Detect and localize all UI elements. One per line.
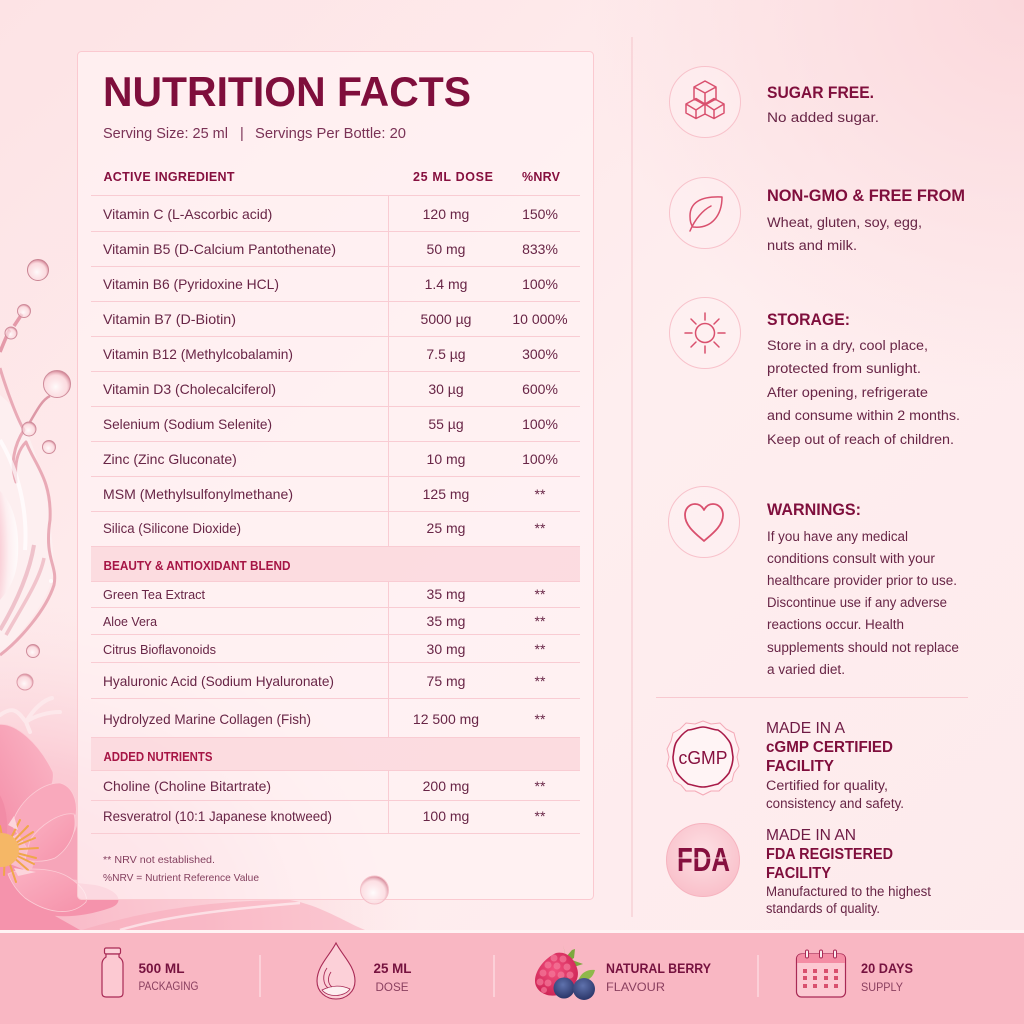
table header: ACTIVE INGREDIENT bbox=[104, 170, 235, 184]
ingredient rows: Zinc (Zinc Gluconate) bbox=[103, 451, 237, 467]
text: FACILITY bbox=[766, 865, 832, 882]
item: 20 days supply bbox=[796, 950, 913, 997]
beauty blend rows: Hyaluronic Acid (Sodium Hyaluronate) bbox=[103, 673, 334, 689]
text: 25 ML bbox=[374, 961, 412, 976]
table rules bbox=[91, 195, 580, 834]
ingredient rows: 100% bbox=[522, 451, 558, 467]
added nutrient rows: 100 mg bbox=[423, 808, 469, 824]
text bbox=[767, 529, 959, 677]
text: 20 DAYS bbox=[861, 961, 913, 976]
added nutrient rows: 200 mg bbox=[423, 778, 469, 794]
text: Wheat, gluten, soy, egg, bbox=[767, 215, 922, 231]
beauty blend rows: ** bbox=[535, 586, 546, 602]
certification: FDA bbox=[666, 824, 931, 916]
ingredient rows: ** bbox=[535, 486, 546, 502]
section heading: added nutrients: ADDED NUTRIENTS bbox=[104, 750, 212, 764]
text: standards of quality. bbox=[766, 901, 880, 916]
icon: calendar bbox=[796, 950, 846, 997]
ingredient rows: 1.4 mg bbox=[425, 276, 467, 292]
item: 500 ml packaging bbox=[102, 948, 198, 997]
item: 20 days supply: SUPPLY bbox=[861, 980, 903, 994]
item: 25 ml dose bbox=[317, 943, 412, 999]
item: 25 ml dose: DOSE bbox=[376, 980, 408, 994]
ingredient rows: 55 µg bbox=[428, 416, 464, 432]
table header bbox=[104, 170, 561, 184]
added nutrient rows: ** bbox=[535, 778, 546, 794]
section bands bbox=[91, 546, 580, 770]
text: healthcare provider prior to use. bbox=[767, 573, 957, 588]
footnotes: %NRV = Nutrient Reference Value bbox=[103, 872, 259, 884]
panel: nutrition facts card bbox=[78, 52, 594, 900]
text: reactions occur. Health bbox=[767, 617, 904, 632]
footnotes bbox=[103, 854, 259, 884]
text: No added sugar. bbox=[767, 110, 879, 126]
beauty blend rows: Green Tea Extract bbox=[103, 587, 205, 602]
serving info bbox=[103, 126, 406, 142]
icon: leaf bbox=[670, 178, 740, 248]
text: FACILITY bbox=[766, 758, 835, 775]
ingredient rows: 100% bbox=[522, 416, 558, 432]
water splash illustration bbox=[0, 260, 70, 732]
badge: cGMP bbox=[667, 721, 739, 795]
serving info: Servings Per Bottle: 20 bbox=[255, 126, 406, 142]
item: 500 ml packaging: PACKAGING bbox=[138, 979, 198, 993]
beauty blend rows: 35 mg bbox=[427, 586, 465, 602]
icon: sugar cubes bbox=[670, 66, 740, 138]
item: natural berry flavour: FLAVOUR bbox=[606, 980, 665, 994]
text bbox=[766, 827, 931, 916]
text bbox=[766, 720, 904, 811]
bubble bbox=[360, 876, 388, 904]
beauty blend rows bbox=[103, 586, 546, 727]
icon: sun bbox=[670, 298, 740, 368]
badge: cGMP: cGMP bbox=[678, 748, 728, 768]
column divider bbox=[631, 37, 633, 917]
added nutrient rows: Resveratrol (10:1 Japanese knotweed) bbox=[103, 808, 332, 824]
ingredient rows: 833% bbox=[522, 241, 558, 257]
text: Discontinue use if any adverse bbox=[767, 595, 947, 610]
ingredient rows: 150% bbox=[522, 206, 558, 222]
text: 500 ML bbox=[138, 961, 184, 976]
ingredient rows: Vitamin B7 (D-Biotin) bbox=[103, 311, 236, 327]
feature: non-gmo bbox=[670, 178, 965, 254]
feature: storage bbox=[670, 298, 960, 448]
beauty blend rows: 75 mg bbox=[427, 673, 465, 689]
ingredient rows: Vitamin B12 (Methylcobalamin) bbox=[103, 346, 293, 362]
table header: 25 ML DOSE bbox=[413, 170, 493, 184]
footnotes: ** NRV not established. bbox=[103, 854, 215, 866]
ingredient rows: Vitamin B5 (D-Calcium Pantothenate) bbox=[103, 241, 336, 257]
bottom bar bbox=[0, 930, 1024, 1024]
text bbox=[767, 338, 960, 448]
added nutrient rows: Choline (Choline Bitartrate) bbox=[103, 778, 271, 794]
divider bbox=[656, 696, 968, 698]
text: Manufactured to the highest bbox=[766, 884, 931, 899]
text: NATURAL BERRY bbox=[606, 961, 711, 976]
ingredient rows: 25 mg bbox=[427, 520, 465, 536]
icon: drop bbox=[317, 943, 355, 999]
ingredient rows bbox=[103, 206, 568, 536]
ingredient rows: 300% bbox=[522, 346, 558, 362]
ingredient rows: Silica (Silicone Dioxide) bbox=[103, 520, 241, 536]
text: consistency and safety. bbox=[766, 796, 904, 811]
heading: SUGAR FREE. bbox=[767, 84, 874, 102]
ingredient rows: 125 mg bbox=[423, 486, 469, 502]
heading: STORAGE: bbox=[767, 311, 850, 329]
ingredient rows: Vitamin B6 (Pyridoxine HCL) bbox=[103, 276, 279, 292]
added nutrient rows bbox=[103, 778, 546, 824]
icon: berries bbox=[535, 945, 595, 1000]
badge: FDA bbox=[666, 824, 740, 896]
beauty blend rows: ** bbox=[535, 641, 546, 657]
ingredient rows: 30 µg bbox=[428, 381, 464, 397]
text: MADE IN AN bbox=[766, 827, 856, 844]
beauty blend rows: 35 mg bbox=[427, 613, 465, 629]
ingredient rows: 50 mg bbox=[427, 241, 465, 257]
ingredient rows: 600% bbox=[522, 381, 558, 397]
beauty blend rows: 12 500 mg bbox=[413, 711, 479, 727]
text: MADE IN A bbox=[766, 720, 846, 737]
beauty blend rows: ** bbox=[535, 613, 546, 629]
water swoosh under panel bbox=[82, 900, 365, 930]
item: natural berry flavour bbox=[535, 945, 711, 1000]
text: nuts and milk. bbox=[767, 238, 857, 254]
icon: bottle bbox=[102, 948, 123, 997]
ingredient rows: ** bbox=[535, 520, 546, 536]
table header: %NRV bbox=[522, 170, 561, 184]
text: Store in a dry, cool place, bbox=[767, 338, 928, 354]
ingredient rows: 10 000% bbox=[512, 311, 568, 327]
serving info: Serving Size: 25 ml bbox=[103, 126, 228, 142]
ingredient rows: 7.5 µg bbox=[426, 346, 466, 362]
serving info: | bbox=[240, 126, 244, 142]
ingredient rows: Selenium (Sodium Selenite) bbox=[103, 416, 272, 432]
text: Keep out of reach of children. bbox=[767, 432, 954, 448]
ingredient rows: 100% bbox=[522, 276, 558, 292]
section heading: beauty blend: BEAUTY & ANTIOXIDANT BLEND bbox=[104, 559, 290, 573]
beauty blend rows: Citrus Bioflavonoids bbox=[103, 642, 216, 657]
text: protected from sunlight. bbox=[767, 361, 921, 377]
text: conditions consult with your bbox=[767, 551, 936, 566]
text: a varied diet. bbox=[767, 662, 845, 677]
beauty blend rows: Aloe Vera bbox=[103, 614, 158, 629]
beauty blend rows: Hydrolyzed Marine Collagen (Fish) bbox=[103, 711, 311, 727]
text: After opening, refrigerate bbox=[767, 385, 928, 401]
text bbox=[767, 215, 922, 254]
ingredient rows: Vitamin C (L-Ascorbic acid) bbox=[103, 206, 272, 222]
text: supplements should not replace bbox=[767, 640, 959, 655]
beauty blend rows: ** bbox=[535, 711, 546, 727]
icon: heart bbox=[668, 486, 740, 558]
title: NUTRITION FACTS bbox=[103, 68, 471, 115]
beauty blend rows: 30 mg bbox=[427, 641, 465, 657]
ingredient rows: 5000 µg bbox=[421, 311, 471, 327]
heading: NON-GMO & FREE FROM bbox=[767, 187, 965, 205]
text: If you have any medical bbox=[767, 529, 908, 544]
ingredient rows: MSM (Methylsulfonylmethane) bbox=[103, 486, 293, 502]
text: and consume within 2 months. bbox=[767, 408, 960, 424]
feature: sugar free bbox=[670, 66, 879, 138]
heading: WARNINGS: bbox=[767, 501, 861, 519]
flower illustration bbox=[0, 724, 118, 930]
text: FDA REGISTERED bbox=[766, 846, 893, 863]
feature: warnings bbox=[668, 486, 959, 677]
text: cGMP CERTIFIED bbox=[766, 739, 893, 756]
added nutrient rows: ** bbox=[535, 808, 546, 824]
ingredient rows: Vitamin D3 (Cholecalciferol) bbox=[103, 381, 276, 397]
certification: cGMP bbox=[667, 720, 904, 811]
text: Certified for quality, bbox=[766, 778, 888, 793]
beauty blend rows: ** bbox=[535, 673, 546, 689]
badge: FDA: FDA bbox=[677, 841, 730, 878]
ingredient rows: 120 mg bbox=[423, 206, 469, 222]
ingredient rows: 10 mg bbox=[427, 451, 465, 467]
